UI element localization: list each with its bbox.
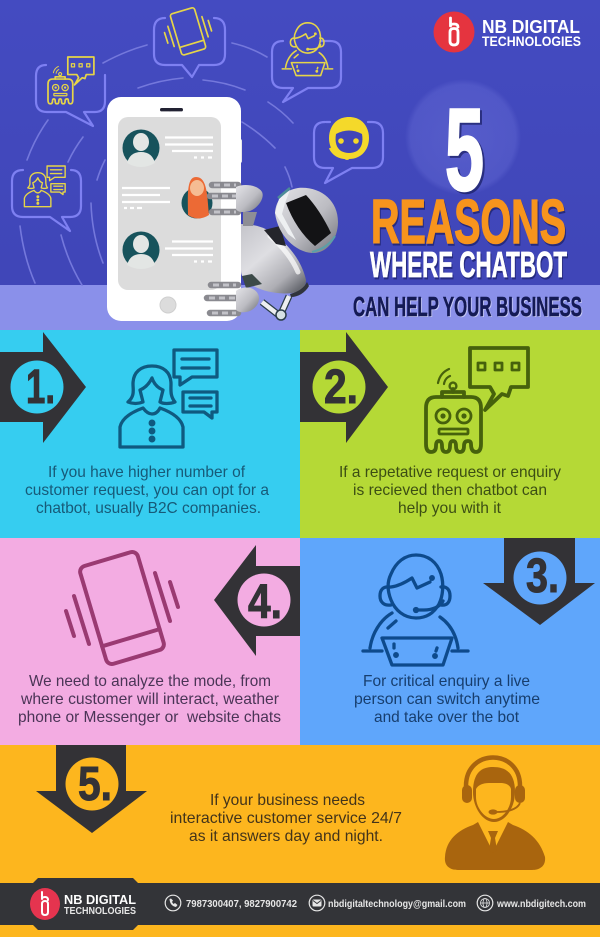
text 5: If your business needs [210, 792, 365, 809]
text 2: help you with it [398, 500, 502, 517]
text 4: where customer will interact, weather [20, 691, 280, 708]
title [353, 84, 583, 323]
robot head [275, 188, 338, 253]
text 2: is recieved then chatbot can [353, 482, 547, 499]
robot body [241, 224, 306, 293]
robot upper hand [210, 185, 263, 212]
phone [107, 97, 242, 321]
robot [207, 185, 338, 320]
panel 2 [300, 330, 600, 538]
text 5: interactive customer service 24/7 [170, 810, 402, 827]
bubble: woman [12, 166, 81, 231]
logo: NB Digital top [434, 12, 581, 52]
bubble: robot [36, 57, 105, 126]
home button [160, 297, 176, 313]
arrow 5 [36, 745, 147, 833]
footer bar [0, 883, 600, 925]
arrow 4: 4. [248, 576, 282, 629]
icon: vibrating phone [66, 551, 178, 665]
robot lower hand [207, 285, 259, 313]
title: 5 [447, 86, 486, 217]
hero band [0, 285, 600, 330]
contact: phone [165, 895, 297, 911]
arrow 5: 5. [78, 758, 112, 811]
icon: robot with speech bubble [426, 348, 528, 452]
text 3: For critical enquiry a live [363, 673, 530, 690]
text 4: phone or Messenger or website chats [18, 709, 281, 726]
text 1 [25, 464, 269, 517]
text 1: If you have higher number of [48, 464, 246, 481]
icon: live agent at laptop [363, 555, 468, 665]
bubble: phone [154, 7, 225, 77]
text 3: and take over the bot [374, 709, 520, 726]
arrow 2: 2. [324, 361, 358, 414]
arrow 3: 3. [526, 550, 559, 603]
panel 4 [0, 538, 300, 745]
icon: woman with chat bubbles [120, 350, 217, 447]
arrow 1 [0, 332, 86, 443]
hero background [0, 0, 600, 330]
arrow 1: 1. [26, 361, 55, 414]
logo: NB Digital top: NB DIGITAL [482, 17, 580, 37]
contact: email: nbdigitaltechnology@gmail.com [328, 898, 466, 910]
text 1: customer request, you can opt for a [25, 482, 269, 499]
panel 1 [0, 330, 300, 538]
text 3 [354, 673, 540, 726]
orbit lines [20, 43, 293, 285]
contact: phone: 7987300407, 9827900742 [186, 898, 297, 910]
contact: website [477, 895, 586, 911]
robot neck [264, 226, 286, 246]
arrow 3 [483, 538, 595, 625]
text 5 [170, 792, 402, 845]
text 1: chatbot, usually B2C companies. [36, 500, 261, 517]
chat row 1 [122, 130, 213, 167]
chat row 2 [122, 177, 212, 218]
title: 5 [445, 84, 484, 215]
footer logo: NB DIGITAL [64, 892, 136, 907]
text 3: person can switch anytime [354, 691, 540, 708]
text 4: We need to analyze the mode, from [29, 673, 271, 690]
text 5: as it answers day and night. [189, 828, 383, 845]
panel 3 [300, 538, 600, 745]
footer logo: TECHNOLOGIES [64, 906, 136, 917]
text 2 [339, 464, 561, 517]
bubble: support face [314, 117, 383, 183]
arrow 2 [300, 332, 388, 443]
icon: agent with headset [445, 758, 545, 870]
contact: email [309, 895, 466, 911]
phone screen [118, 117, 221, 290]
chat row 3 [122, 232, 213, 269]
contact: website: www.nbdigitech.com [496, 898, 586, 910]
logo: NB Digital top: TECHNOLOGIES [482, 34, 581, 49]
panel 5 [0, 745, 600, 937]
title glow [405, 79, 521, 195]
text 2: If a repetative request or enquiry [339, 464, 561, 481]
arrow 4 [214, 545, 300, 656]
robot leg [262, 296, 289, 320]
text 4 [18, 673, 281, 726]
footer logo [30, 878, 140, 930]
bubble: agent [272, 23, 341, 102]
